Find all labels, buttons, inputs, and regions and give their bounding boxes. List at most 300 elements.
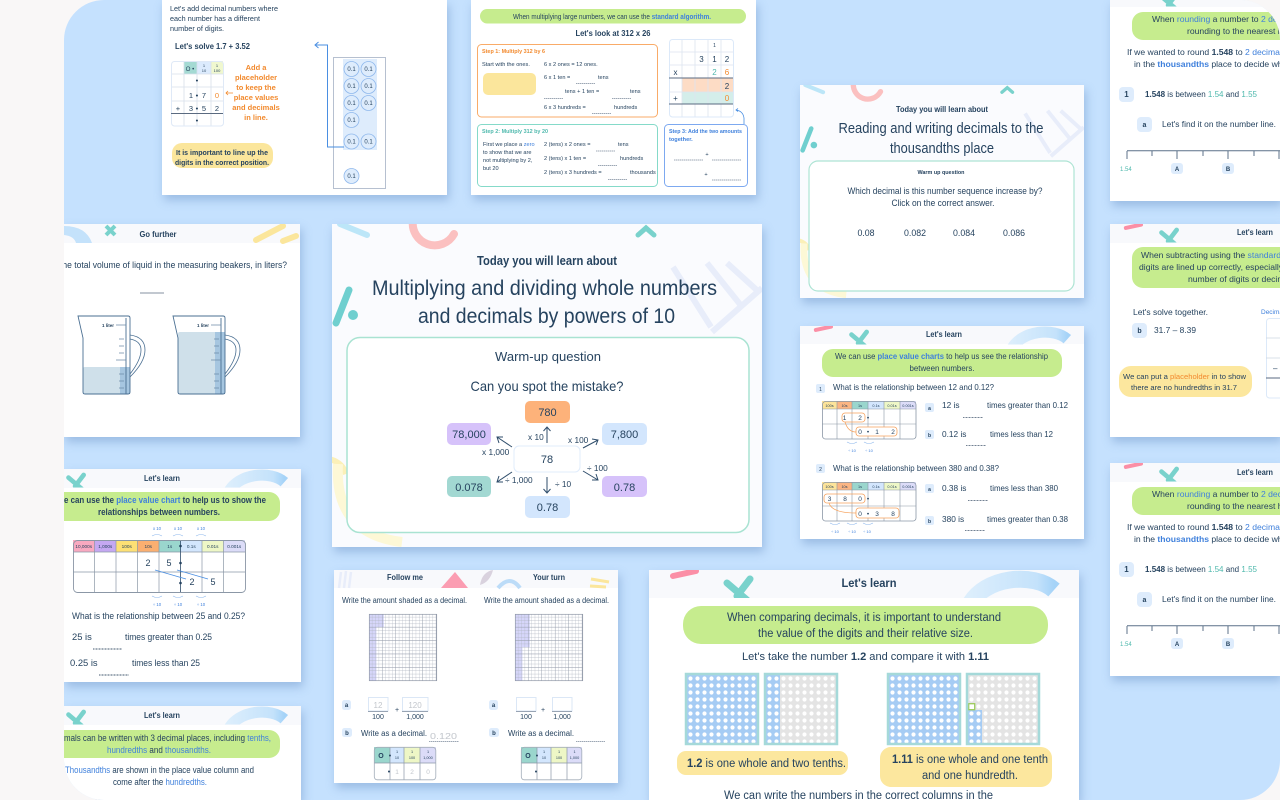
number line: A: [1175, 167, 1180, 173]
chart: 380 and 0.38: 0.1s: [872, 485, 880, 489]
answers two: times less than 380: [990, 483, 1058, 493]
fraction a: a: [492, 703, 496, 709]
panel: step 2: Step 2: Multiply 312 by 20: [482, 129, 548, 135]
step 1: 1.548 is between 1.54 and 1.55: [1145, 564, 1257, 574]
panel: step 2: tens: [618, 142, 629, 148]
centre number: [514, 446, 580, 472]
multiplication table: 2: [712, 68, 717, 77]
slide: rounding decimals, lower right: [1110, 463, 1280, 676]
panel: step 1: Start with the ones.: [482, 62, 530, 68]
chart: 12 and 0.12: 0.01s: [887, 404, 897, 408]
header band: [800, 326, 1084, 350]
multiplication table: 6: [725, 68, 730, 77]
slide: rounding decimals, top right: [1110, 0, 1280, 201]
decimal answer: 0.120: [430, 731, 457, 741]
number line: B: [1226, 642, 1231, 648]
callout: placeholder: [1119, 366, 1252, 397]
arrow: step 3 to table: [736, 108, 744, 124]
icon: beaker two: [173, 316, 240, 394]
answer options: 0.08: [857, 228, 875, 238]
panel: step 1: tens + 1 ten =: [565, 89, 599, 95]
question one: 1: [819, 387, 822, 393]
answers two: 0.38 is: [942, 483, 966, 493]
value boxes: 7,800: [611, 429, 638, 441]
answers one: a: [928, 406, 931, 412]
place value table: 1,000: [423, 756, 433, 760]
place value table: 1: [411, 750, 413, 754]
place value chart: x 10: [174, 526, 183, 531]
answers two: a: [928, 487, 931, 493]
panel: step 1: 6 x 1 ten =: [544, 75, 570, 81]
addition table: O •: [186, 67, 194, 73]
placeholder note: Add a: [246, 63, 267, 72]
chart: 12 and 0.12: 0.1s: [872, 404, 880, 408]
operation labels: [482, 432, 608, 489]
panel: step 1: Step 1: Multiply 312 by 6: [482, 49, 545, 55]
key point pill: relationships between numbers.: [98, 507, 220, 517]
subtraction table: –: [1273, 364, 1278, 373]
placeholder note: placeholder: [235, 73, 277, 82]
placeholder note: [232, 63, 280, 122]
answers one: 0.12 is: [942, 429, 966, 439]
place value table: •: [535, 769, 538, 776]
multiplication table: 1: [712, 55, 717, 64]
chart: 380 and 0.38: 3: [828, 496, 832, 503]
key point pill: We can use place value charts to help us see the relationship: [835, 352, 1049, 361]
place value table: 1: [427, 750, 429, 754]
step b: [1132, 323, 1196, 338]
key point pill: When comparing decimals, it is important to understand: [727, 612, 1001, 624]
chart: 380 and 0.38: 100s: [825, 485, 834, 489]
chart: 380 and 0.38: 0: [858, 511, 862, 518]
number line: 1.54: [1120, 642, 1132, 648]
decimal answer: [342, 728, 459, 742]
chart: 380 and 0.38: 10s: [841, 485, 848, 489]
chart: 12 and 0.12: 10s: [841, 404, 848, 408]
header band: [64, 224, 300, 243]
chart: 380 and 0.38: 0.01s: [887, 485, 897, 489]
step 1: [1119, 87, 1257, 102]
panel: step 2: 2 (tens) x 1 ten =: [544, 156, 586, 162]
answer options: 0.082: [904, 228, 926, 238]
place value counters: 0.1: [364, 67, 373, 73]
chart: 380 and 0.38: 1s: [858, 485, 862, 489]
place value chart: ÷ 10: [197, 602, 206, 607]
place value table: 2: [410, 769, 414, 776]
key point pill: [30, 730, 280, 758]
chart: 12 and 0.12: 2: [891, 429, 895, 436]
panel: step 2: to show that we are: [483, 150, 532, 156]
place value table: •: [389, 753, 392, 760]
operation labels: x 1,000: [482, 447, 510, 457]
key point pill: [822, 349, 1062, 377]
value boxes: 0.78: [537, 502, 558, 514]
intro text: each number has a different: [170, 14, 261, 23]
place value counters: 0.1: [364, 140, 373, 146]
addition table: •: [196, 91, 199, 100]
intro text: [170, 4, 278, 33]
callout: 1.2: [677, 751, 848, 775]
panel: step 2: but 20: [483, 166, 499, 172]
place value counters: 0.1: [364, 101, 373, 107]
intro text: Let's add decimal numbers where: [170, 4, 278, 13]
chart: 12 and 0.12: 1: [843, 415, 847, 422]
place value chart: [73, 526, 246, 607]
place value counters: 0.1: [364, 84, 373, 90]
sum heading: Let's solve 1.7 + 3.52: [175, 41, 250, 51]
place value table: 0: [426, 769, 430, 776]
place value chart: 0.01s: [207, 544, 219, 549]
addition table: 1: [203, 63, 206, 68]
panel: step 1: tens: [598, 75, 609, 81]
key point pill: between numbers.: [910, 364, 974, 373]
place value counters: [334, 58, 386, 188]
key point pill: [683, 606, 1048, 644]
comparison prompt: Let's take the number 1.2 and compare it with 1.11: [742, 651, 989, 663]
multiplication table: 1: [713, 43, 716, 49]
place value chart: 5: [210, 577, 216, 587]
header band: [1110, 224, 1280, 248]
addition table: 5: [202, 104, 206, 113]
body text: [1127, 47, 1280, 69]
addition table: •: [196, 76, 199, 85]
place value chart: 0.001s: [227, 544, 242, 549]
step a: [1137, 592, 1276, 607]
multiplication table: 0: [725, 94, 730, 103]
question two: 2: [819, 467, 822, 473]
operation labels: x 10: [528, 432, 544, 442]
panel: step 3: +: [704, 172, 708, 178]
placeholder note: in line.: [244, 113, 268, 122]
main slide: multiplying and dividing by powers of 10: [332, 224, 762, 547]
panel: warm-up question: Warm-up question: [495, 349, 601, 364]
hundredths grid: [515, 614, 583, 681]
slide: adding decimals with placeholder: [162, 0, 447, 195]
place value chart: 1,000s: [98, 544, 113, 549]
callout: 1.11: and one hundredth.: [922, 770, 1018, 782]
fraction a: 12: [374, 701, 383, 710]
title: and decimals by powers of 10: [418, 304, 675, 328]
place value counters: 0.1: [347, 118, 356, 124]
chart: 12 and 0.12: 2: [858, 415, 862, 422]
panel: step 2: 2 (tens) x 3 hundreds =: [544, 170, 602, 176]
callout: placeholder: there are no hundredths in 31.7: [1131, 383, 1237, 392]
chart: 12 and 0.12: ÷ 10: [848, 448, 857, 453]
panel: step 2: First we place a zero: [483, 142, 535, 148]
panel: your turn: Write the amount shaded as a decimal.: [484, 596, 609, 605]
fraction a: [489, 698, 572, 721]
answers one: times greater than 0.12: [987, 400, 1068, 410]
question and answers: 25 is: [72, 631, 92, 642]
place value chart: 0.1s: [187, 544, 196, 549]
header band: Let's learn: [1237, 468, 1273, 477]
chart: 380 and 0.38: 0: [858, 496, 862, 503]
operation labels: ÷ 1,000: [505, 475, 533, 485]
header band: [33, 469, 301, 493]
answers two: [925, 483, 1068, 530]
fraction a: 1,000: [406, 714, 424, 721]
value boxes: [447, 401, 647, 518]
panel: step 2: thousands: [630, 170, 656, 176]
question one: What is the relationship between 12 and 0.12?: [833, 382, 994, 392]
place value chart: ÷ 10: [153, 602, 162, 607]
callout: placeholder: We can put a placeholder in to show: [1123, 372, 1247, 381]
panel: step 3: [664, 124, 748, 186]
answers one: times less than 12: [990, 429, 1053, 439]
header band: [1110, 0, 1280, 12]
place value chart: 5: [166, 558, 172, 568]
place value table: [374, 747, 436, 780]
chart: 380 and 0.38: ÷ 10: [863, 529, 872, 534]
icon: beaker one: 1 liter: [102, 323, 114, 328]
panel: step 3: together.: [669, 137, 693, 143]
key point pill: mals can be written with 3 decimal places, including tenths,: [64, 733, 271, 743]
step a: a: [1143, 597, 1147, 604]
place value table: 1,000: [570, 756, 579, 760]
addition table: 10: [202, 68, 207, 73]
hundredths grid: [369, 614, 437, 681]
chart: 380 and 0.38: ÷ 10: [831, 529, 840, 534]
panel: step 1: hundreds: [614, 105, 638, 111]
panel: step 1: 6 x 3 hundreds =: [544, 105, 586, 111]
addition table: +: [176, 104, 181, 113]
fraction a: +: [541, 707, 545, 714]
fraction a: 1,000: [553, 714, 571, 721]
prompt: Let's solve together.: [1133, 307, 1208, 317]
place value chart: 10s: [144, 544, 153, 549]
slide: place value relationships: [800, 326, 1084, 539]
place value chart: 100s: [122, 544, 132, 549]
panel: warm-up question: Click on the correct answer.: [892, 198, 994, 208]
number line: A: [1175, 642, 1180, 648]
decimal answer: [489, 728, 605, 742]
key point pill: [1132, 247, 1280, 288]
panel: step 2: not multiplying by 2,: [483, 158, 533, 164]
answers two: 380 is: [942, 514, 964, 524]
title: thousandths place: [890, 141, 994, 157]
key point pill: hundredths and thousandths.: [107, 745, 211, 755]
chart: 12 and 0.12: 1s: [858, 404, 862, 408]
step 1: [1119, 562, 1257, 577]
fraction a: a: [345, 703, 349, 709]
addition table: •: [196, 116, 199, 125]
step b: b: [1137, 328, 1142, 335]
header band: Let's learn: [144, 711, 180, 720]
chart: 12 and 0.12: [822, 401, 916, 453]
title: [838, 121, 1044, 157]
key point pill: When multiplying large numbers, we can use the standard algorithm.: [513, 12, 711, 21]
fraction a: 100: [372, 714, 384, 721]
addition table: 7: [202, 91, 206, 100]
decimal answer: b: [345, 731, 349, 737]
place value table: 1: [558, 750, 560, 754]
panel: warm-up question: Can you spot the mistake?: [470, 378, 624, 394]
answer options: [857, 228, 1025, 238]
addition table: 2: [215, 104, 219, 113]
place value table: 1: [543, 750, 545, 754]
place value chart: 2: [189, 577, 195, 587]
place value chart: 1s: [167, 544, 173, 549]
chart: 380 and 0.38: [822, 482, 916, 534]
addition table: 1: [216, 63, 219, 68]
place value table: •: [536, 753, 539, 760]
place value chart: x 10: [153, 526, 162, 531]
fraction a: [342, 698, 428, 721]
subheading: Today you will learn about: [896, 104, 988, 114]
place value table: [521, 747, 582, 780]
fraction a: +: [395, 707, 399, 714]
callout: 1.11: 1.11 is one whole and one tenth: [892, 754, 1048, 766]
value boxes: 0.078: [455, 482, 483, 494]
slide: follow me and your turn: [334, 570, 618, 783]
panel: step 1: tens: [630, 89, 641, 95]
value boxes: 0.78: [614, 482, 635, 494]
header band: [1110, 463, 1280, 487]
body text: Thousandths are shown in the place value column and: [65, 765, 254, 775]
question two: What is the relationship between 380 and 0.38?: [833, 463, 999, 473]
place value table: •: [388, 769, 391, 776]
operation labels: ÷ 10: [555, 479, 571, 489]
panel: step 2: hundreds: [620, 156, 644, 162]
subheading: Today you will learn about: [477, 254, 618, 268]
fraction a: 120: [408, 701, 422, 710]
step 1: 1: [1124, 565, 1129, 574]
arrow: placeholder: [226, 91, 233, 95]
slide: standard subtraction, right: [1110, 224, 1280, 437]
multiplication table: +: [673, 94, 678, 103]
panel: step 3: +: [705, 152, 709, 158]
chart: 12 and 0.12: 0.001s: [902, 404, 914, 408]
place value chart: ÷ 10: [174, 602, 183, 607]
place value table: O: [378, 753, 384, 760]
place value table: 10: [395, 756, 399, 760]
title: Reading and writing decimals to the: [838, 121, 1044, 137]
answers one: 12 is: [942, 400, 960, 410]
icon: beaker one: [78, 316, 145, 394]
body text: come after the hundredths.: [113, 777, 207, 787]
header band: [33, 706, 301, 730]
centre number: 78: [541, 454, 553, 466]
chart: 380 and 0.38: 0.001s: [902, 485, 914, 489]
header band: Let's learn: [1237, 228, 1273, 237]
header band: Your turn: [533, 573, 565, 582]
chart: 380 and 0.38: ÷ 10: [848, 529, 857, 534]
multiplication table: [669, 39, 734, 117]
answers one: [925, 400, 1068, 446]
title: [372, 276, 717, 328]
key point pill: [480, 9, 746, 24]
place value counters: 0.1: [347, 174, 356, 180]
place value counters: 0.1: [347, 101, 356, 107]
place value table: O: [525, 753, 531, 760]
key point pill: [1132, 12, 1280, 40]
multiplication table: 3: [699, 55, 704, 64]
chart: 12 and 0.12: 1: [875, 429, 879, 436]
place value counters: 0.1: [347, 67, 356, 73]
step a: [1137, 117, 1276, 132]
decimal answer: Write as a decimal.: [508, 729, 574, 738]
chart: 12 and 0.12: •: [867, 415, 870, 422]
callout: 1.11: [880, 747, 1052, 787]
placeholder note: to keep the: [236, 83, 276, 92]
answers two: b: [928, 519, 931, 525]
panel: step 1: 6 x 2 ones = 12 ones.: [544, 62, 598, 68]
hundred square: whole: [686, 674, 758, 745]
callout: line up digits: digits in the correct position.: [175, 158, 269, 167]
fraction a: 100: [520, 714, 532, 721]
step a: Let's find it on the number line.: [1162, 119, 1276, 129]
heading: Let's look at 312 x 26: [576, 28, 651, 38]
place value table: 100: [556, 756, 562, 760]
answers two: times greater than 0.38: [987, 514, 1068, 524]
title: Multiplying and dividing whole numbers: [372, 276, 717, 300]
hundred square: whole: [888, 674, 960, 745]
question and answers: times greater than 0.25: [125, 631, 212, 642]
decimal answer: Write as a decimal.: [361, 729, 427, 738]
step 1: 1.548 is between 1.54 and 1.55: [1145, 89, 1257, 99]
step a: Let's find it on the number line.: [1162, 594, 1276, 604]
addition table: 100: [214, 68, 221, 73]
hundred square: two tenths: [765, 674, 837, 745]
question: the total volume of liquid in the measuring beakers, in liters?: [64, 260, 287, 270]
place value counters: 0.1: [347, 140, 356, 146]
place value counters: 0.1: [347, 84, 356, 90]
place value table: 100: [409, 756, 415, 760]
header band: Follow me: [387, 573, 424, 582]
number line: [1120, 151, 1280, 174]
answer line: [140, 292, 164, 294]
slide: standard algorithm: [471, 0, 756, 195]
addition table: •: [196, 104, 199, 113]
chart: 12 and 0.12: 0: [858, 429, 862, 436]
panel: follow me: [342, 596, 467, 780]
arrows: [497, 427, 598, 493]
addition table: 0: [215, 91, 219, 100]
arrow: counters to sum: [315, 42, 344, 147]
slide: go further, measuring beakers: [64, 224, 300, 437]
value boxes: 780: [538, 407, 557, 419]
key point pill: [1132, 487, 1280, 515]
key point pill: e can use the place value chart to help us to show the: [64, 495, 266, 505]
slide: comparing decimals: [649, 570, 1079, 800]
addition table: 1: [189, 91, 193, 100]
answer options: 0.084: [953, 228, 975, 238]
chart: 380 and 0.38: 3: [875, 511, 879, 518]
slide: reading and writing decimals: [800, 85, 1084, 298]
step a: a: [1143, 122, 1147, 129]
callout: 1.2: 1.2 is one whole and two tenths.: [687, 758, 846, 770]
header band: Let's learn: [144, 474, 180, 483]
header band: Let's learn: [926, 330, 962, 339]
body text: [65, 765, 254, 787]
decimal answer: b: [492, 731, 496, 737]
multiplication table: 2: [725, 82, 730, 91]
value boxes: 78,000: [452, 429, 486, 441]
place value table: 1: [573, 750, 576, 754]
panel: warm-up question: Warm up question: [918, 170, 965, 176]
slide: decimals to three places: [64, 706, 301, 800]
panel: your turn: [484, 596, 609, 780]
chart: 12 and 0.12: ÷ 10: [865, 448, 874, 453]
operation labels: ÷ 100: [587, 463, 608, 473]
answer options: 0.086: [1003, 228, 1025, 238]
question and answers: 0.25 is: [70, 657, 98, 668]
intro text: number of digits.: [170, 24, 224, 33]
number line: 1.54: [1120, 167, 1132, 173]
panel: step 2: [478, 124, 658, 186]
callout: line up digits: It is important to line up the: [176, 148, 268, 157]
panel: warm-up question: Which decimal is this number sequence increase by?: [848, 186, 1043, 196]
